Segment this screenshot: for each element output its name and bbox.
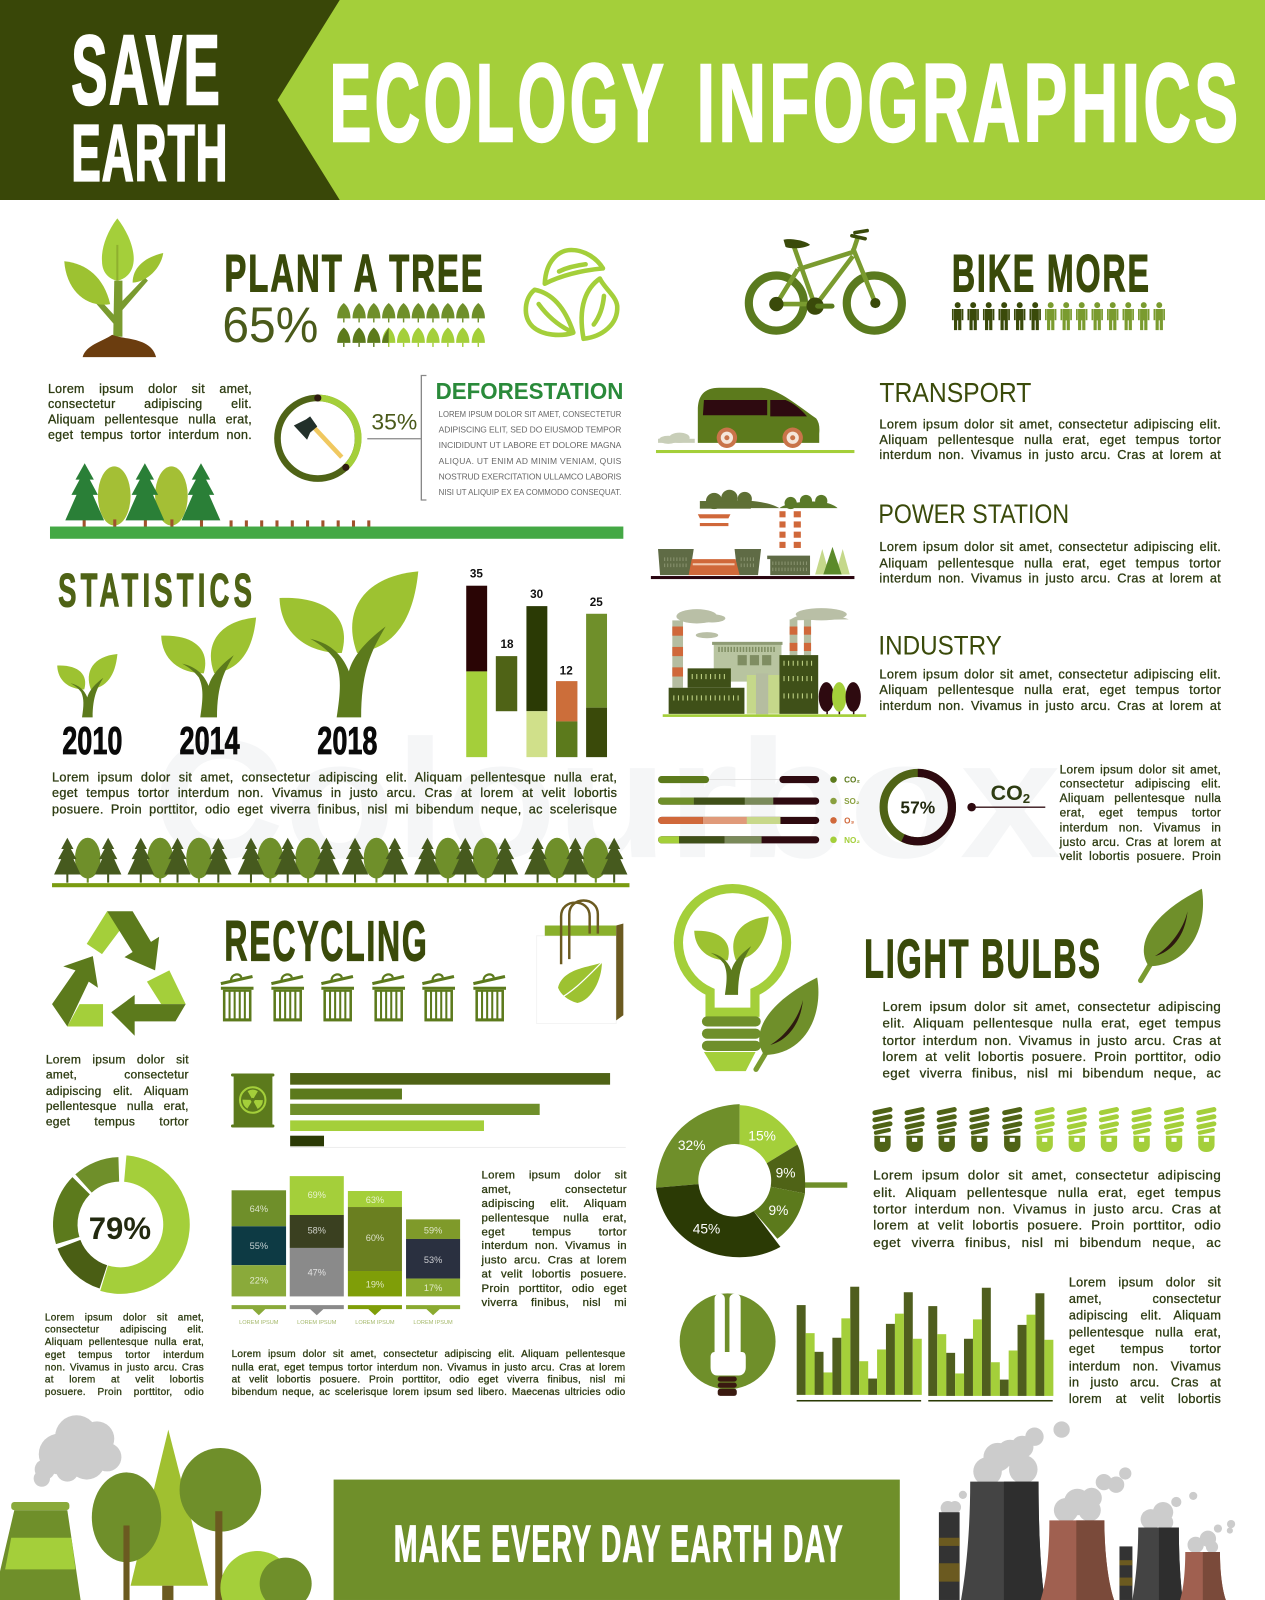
smoke cloud (34, 1415, 121, 1487)
icon: bicycle (749, 231, 902, 331)
icon: recycle arrows (52, 911, 186, 1036)
text: deforestation body: ALIQUA. UT ENIM AD MINIM VENIAM, QUIS (439, 456, 622, 466)
text: recycling left: amet, consectetur (46, 1068, 189, 1082)
sprout 2010 (57, 654, 117, 717)
text: plant a tree: Aliquam pellentesque nulla erat, (48, 412, 252, 426)
chart: stacked columns (232, 1176, 460, 1326)
text: donut caption: Lorem ipsum dolor sit amet, (45, 1312, 204, 1323)
bar chart: paired bars left (797, 1287, 922, 1402)
illustration: deforestation strip (50, 463, 623, 539)
text: deforestation body: NISI UT ALIQUIP EX EA COMMODO CONSEQUAT. (439, 487, 621, 497)
year labels: 2010 (62, 720, 122, 763)
text: donut caption (44, 1312, 204, 1398)
text: co2: Lorem ipsum dolor sit amet, (1060, 763, 1221, 776)
bar chart: horizontal (290, 1073, 626, 1148)
chart: 79% donut: 79% (89, 1210, 151, 1246)
text: plant a tree (48, 381, 252, 442)
icon: shopping bag (537, 901, 623, 1023)
heading: statistics: STATISTICS (58, 565, 256, 617)
text: stacked chart side: Proin porttitor, odio eget (482, 1282, 627, 1295)
text: plant a tree: eget tempus tortor interdum non. (48, 427, 252, 441)
text: statistics: Lorem ipsum dolor sit amet, consectetur adipiscing elit. Aliquam pellentesque nulla erat, (52, 770, 617, 784)
text: stacked chart below: nulla erat, eget tempus tortor interdum non. Vivamus in justo arcu. Cras at lorem (232, 1362, 625, 1373)
text: stacked chart side: eget tempus tortor (482, 1226, 627, 1238)
text: deforestation body: NOSTRUD EXERCITATION ULLAMCO LABORIS (439, 472, 622, 482)
text: bar charts side: Lorem ipsum dolor sit (1069, 1275, 1221, 1289)
title: ecology infographics: ECOLOGY (330, 42, 667, 165)
text: plant a tree: consectetur adipiscing elit. (48, 396, 252, 411)
chart: stacked columns: 60% (366, 1233, 384, 1243)
illustration: power station (651, 490, 854, 579)
pictogram: people (952, 302, 1165, 330)
text: co2: Aliquam pellentesque nulla (1060, 792, 1221, 805)
icon: leaf (1141, 889, 1203, 981)
icon: radioactive barrel (231, 1073, 274, 1128)
title: ecology infographics (330, 42, 1242, 165)
callout: co2: CO (991, 781, 1023, 805)
text: light bulbs: lorem at velit lobortis posuere. Proin porttitor, odio (882, 1049, 1221, 1064)
bar chart: paired bars right (928, 1288, 1053, 1402)
text: co2: interdum non. Vivamus in (1060, 821, 1221, 834)
text: industry (879, 668, 1221, 713)
illustration: light bulb with plant (678, 889, 818, 1071)
heading: recycling: RECYCLING (224, 910, 428, 973)
text: bar charts side: in justo arcu. Cras at (1069, 1376, 1221, 1390)
chart: emission bars: O₃ (844, 816, 854, 825)
text: co2: consectetur adipiscing elit. (1060, 778, 1221, 791)
illustration: power plant cooling towers (939, 1421, 1235, 1600)
text: stacked chart side (481, 1170, 627, 1309)
chart: emission bars: CO₂ (844, 776, 860, 785)
text: deforestation body: LOREM IPSUM DOLOR SIT AMET, CONSECTETUR (439, 409, 621, 419)
text: donut caption: eget tempus tortor interdum (45, 1350, 204, 1361)
text: bar charts side: amet, consectetur (1069, 1292, 1221, 1306)
text: bar charts side: adipiscing elit. Aliquam (1069, 1309, 1221, 1323)
text: stacked chart side: interdum non. Vivamus in (482, 1240, 627, 1252)
text: spiral bulbs (873, 1167, 1221, 1250)
illustration: chimney and trees (0, 1415, 312, 1600)
text: donut caption: at lorem at velit lobortis (45, 1375, 204, 1386)
chart: stacked columns: LOREM IPSUM (355, 1320, 395, 1326)
icon: recycling leaves (526, 250, 617, 339)
watermark: Colourbox (153, 705, 1061, 893)
text: stacked chart side: adipiscing elit. Aliquam (482, 1198, 627, 1210)
text: recycling left: adipiscing elit. Aliquam (46, 1083, 189, 1098)
chart: stacked columns: 55% (250, 1241, 268, 1251)
text: power station (879, 540, 1221, 586)
text: spiral bulbs: eget viverra finibus, nisl mi bibendum neque, ac (873, 1234, 1221, 1250)
text: statistics (52, 770, 617, 816)
text: industry: Aliquam pellentesque nulla erat, eget tempus tortor (879, 683, 1221, 697)
text: donut caption: consectetur adipiscing elit. (45, 1324, 204, 1336)
text: stacked chart below (232, 1349, 625, 1398)
heading: power station: POWER STATION (878, 499, 1069, 529)
text: spiral bulbs: Lorem ipsum dolor sit amet, consectetur adipiscing (873, 1167, 1221, 1183)
bar chart: statistics: 12 (560, 664, 573, 677)
title: save earth: EARTH (71, 109, 229, 198)
text: transport: Lorem ipsum dolor sit amet, consectetur adipiscing elit. (879, 417, 1221, 432)
chart: energy donut: 32% (678, 1138, 705, 1153)
chart: emission bars: SO₂ (844, 797, 860, 806)
bar chart: statistics: 35 (470, 568, 483, 581)
chart: energy donut (656, 1104, 847, 1257)
heading: industry: INDUSTRY (878, 631, 1002, 661)
text: donut caption: Aliquam pellentesque nulla erat, (45, 1337, 204, 1348)
text: stacked chart side: at velit lobortis posuere. (482, 1268, 627, 1281)
chart: emission bars: NO₂ (844, 836, 860, 845)
text: bar charts side: eget tempus tortor (1069, 1342, 1221, 1356)
text: statistics: posuere. Proin porttitor, odio eget viverra finibus, nisl mi bibendum neque, ac scelerisque (52, 802, 617, 816)
callout bracket (367, 376, 426, 500)
header banner (0, 0, 1265, 200)
pictogram: trash bins (221, 974, 506, 1021)
title: save earth: SAVE (71, 15, 221, 125)
chart: 57% ring: 57% (900, 797, 935, 817)
text: bar charts side (1069, 1275, 1221, 1407)
text: stacked chart side: amet, consectetur (482, 1184, 627, 1196)
text: deforestation body: ADIPISCING ELIT, SED DO EIUSMOD TEMPOR (439, 425, 621, 435)
banner: earth day (334, 1480, 900, 1600)
text: recycling left: Lorem ipsum dolor sit (46, 1052, 189, 1067)
text: donut caption: posuere. Proin porttitor, odio (45, 1387, 204, 1398)
icon: axe (294, 416, 342, 457)
chart: stacked columns: 69% (308, 1190, 326, 1200)
chart: stacked columns: 17% (424, 1283, 442, 1293)
chart: stacked columns: 59% (424, 1226, 442, 1236)
chart: stacked columns: LOREM IPSUM (413, 1320, 453, 1326)
text: light bulbs: eget viverra finibus, nisl mi bibendum neque, ac (882, 1066, 1221, 1081)
bar chart: statistics (466, 568, 607, 757)
chart: 79% donut (43, 1147, 198, 1302)
smoke clouds (941, 1421, 1235, 1553)
chart: emission bars (658, 776, 860, 845)
heading: deforestation: DEFORESTATION (436, 378, 623, 404)
text: light bulbs: tortor interdum non. Vivamus in justo arcu. Cras at (882, 1032, 1221, 1048)
pictogram: tree rows (337, 303, 485, 347)
year labels (62, 720, 377, 763)
stat: 35%: 35% (371, 410, 417, 435)
text: power station: interdum non. Vivamus in justo arcu. Cras at lorem at (879, 571, 1221, 586)
illustration: transport van (656, 388, 854, 453)
text: stacked chart side: justo arcu. Cras at lorem (482, 1254, 627, 1266)
text: transport (879, 417, 1221, 463)
text: stacked chart side: viverra finibus, nisl mi (482, 1296, 627, 1309)
text: deforestation body: INCIDIDUNT UT LABORE ET DOLORE MAGNA (439, 440, 622, 450)
stat: 65%: 65% (222, 297, 318, 353)
sprout 2014 (161, 618, 256, 717)
chart: energy donut: 9% (776, 1166, 796, 1181)
text: spiral bulbs: tortor interdum non. Vivamus in justo arcu. Cras at (873, 1201, 1221, 1216)
chart: stacked columns: 47% (308, 1267, 326, 1278)
text: co2: justo arcu. Cras at lorem at (1060, 836, 1221, 849)
text: light bulbs: elit. Aliquam pellentesque nulla erat, eget tempus (882, 1016, 1221, 1031)
heading: light bulbs: LIGHT BULBS (864, 928, 1102, 990)
text: light bulbs: Lorem ipsum dolor sit amet, consectetur adipiscing (882, 999, 1221, 1014)
text: power station: Lorem ipsum dolor sit amet, consectetur adipiscing elit. (879, 540, 1221, 554)
title: save earth (71, 15, 229, 198)
text: transport: Aliquam pellentesque nulla erat, eget tempus tortor (879, 433, 1221, 447)
text: spiral bulbs: lorem at velit lobortis posuere. Proin porttitor, odio (873, 1218, 1221, 1233)
text: co2: velit lobortis posuere. Proin (1060, 850, 1221, 863)
text: plant a tree: Lorem ipsum dolor sit amet, (48, 381, 252, 395)
chart: stacked columns: LOREM IPSUM (297, 1320, 337, 1326)
text: industry: interdum non. Vivamus in justo arcu. Cras at lorem at (879, 699, 1221, 713)
icon: cfl bulb (680, 1293, 776, 1396)
chart: stacked columns: LOREM IPSUM (239, 1320, 279, 1326)
icon: sapling (64, 218, 163, 357)
chart: stacked columns: 53% (424, 1255, 442, 1265)
bar chart: statistics: 30 (530, 588, 544, 601)
bar chart: statistics: 25 (590, 596, 603, 609)
tree line: forest (52, 838, 629, 887)
text: light bulbs (882, 999, 1221, 1081)
text: stacked chart side: Lorem ipsum dolor sit (482, 1170, 627, 1182)
chart: stacked columns: 58% (308, 1226, 326, 1236)
callout: co2: 2 (1023, 791, 1030, 806)
year labels: 2014 (180, 720, 240, 763)
chart: stacked columns: 19% (366, 1280, 384, 1290)
year labels: 2018 (317, 720, 377, 763)
chart: axe ring 35% (277, 394, 358, 479)
text: donut caption: non. Vivamus in justo arcu. Cras (45, 1362, 204, 1373)
chart: stacked columns: 22% (250, 1276, 268, 1286)
text: co2: erat, eget tempus tortor (1060, 807, 1221, 820)
chart: energy donut: 9% (768, 1203, 788, 1218)
chart: stacked columns: 64% (250, 1204, 268, 1214)
text: spiral bulbs: elit. Aliquam pellentesque nulla erat, eget tempus (873, 1184, 1221, 1199)
chart: energy donut: 15% (748, 1128, 776, 1143)
text: bar charts side: pellentesque nulla erat, (1069, 1325, 1221, 1340)
callout: co2 (967, 781, 1045, 811)
text: industry: Lorem ipsum dolor sit amet, consectetur adipiscing elit. (879, 668, 1221, 682)
text: stacked chart side: pellentesque nulla erat, (482, 1212, 627, 1224)
text: stacked chart below: bibendum neque, ac scelerisque lorem ipsum sed libero. Maecenas ultricies odio (232, 1387, 625, 1398)
text: deforestation body (439, 409, 622, 497)
text: stacked chart below: at velit lobortis posuere. Proin porttitor, odio eget viverra finibus, nisl mi (232, 1374, 625, 1386)
chart: 57% ring (884, 773, 952, 841)
sprout 2018 (280, 571, 418, 717)
text: recycling left (46, 1052, 189, 1129)
text: transport: interdum non. Vivamus in justo arcu. Cras at lorem at (879, 448, 1221, 463)
heading: plant a tree: PLANT A TREE (224, 244, 485, 303)
banner: earth day: MAKE EVERY DAY EARTH DAY (394, 1516, 844, 1574)
text: bar charts side: lorem at velit lobortis (1069, 1392, 1221, 1407)
heading: transport: TRANSPORT (879, 377, 1032, 408)
illustration: industry (663, 608, 866, 717)
text: co2 (1059, 763, 1221, 863)
chart: stacked columns: 63% (366, 1195, 384, 1205)
chart: energy donut: 45% (693, 1222, 720, 1237)
pictogram: spiral bulbs (872, 1107, 1217, 1152)
bar chart: statistics: 18 (501, 638, 514, 651)
text: bar charts side: interdum non. Vivamus (1069, 1359, 1221, 1373)
text: recycling left: eget tempus tortor (46, 1115, 189, 1129)
text: statistics: eget tempus tortor interdum non. Vivamus in justo arcu. Cras at lorem at velit lobortis (52, 786, 617, 800)
text: power station: Aliquam pellentesque nulla erat, eget tempus tortor (879, 556, 1221, 570)
sprouts growth (57, 571, 418, 717)
text: stacked chart below: Lorem ipsum dolor sit amet, consectetur adipiscing elit. Aliquam pellentesque (232, 1349, 625, 1360)
text: recycling left: pellentesque nulla erat, (46, 1099, 189, 1113)
